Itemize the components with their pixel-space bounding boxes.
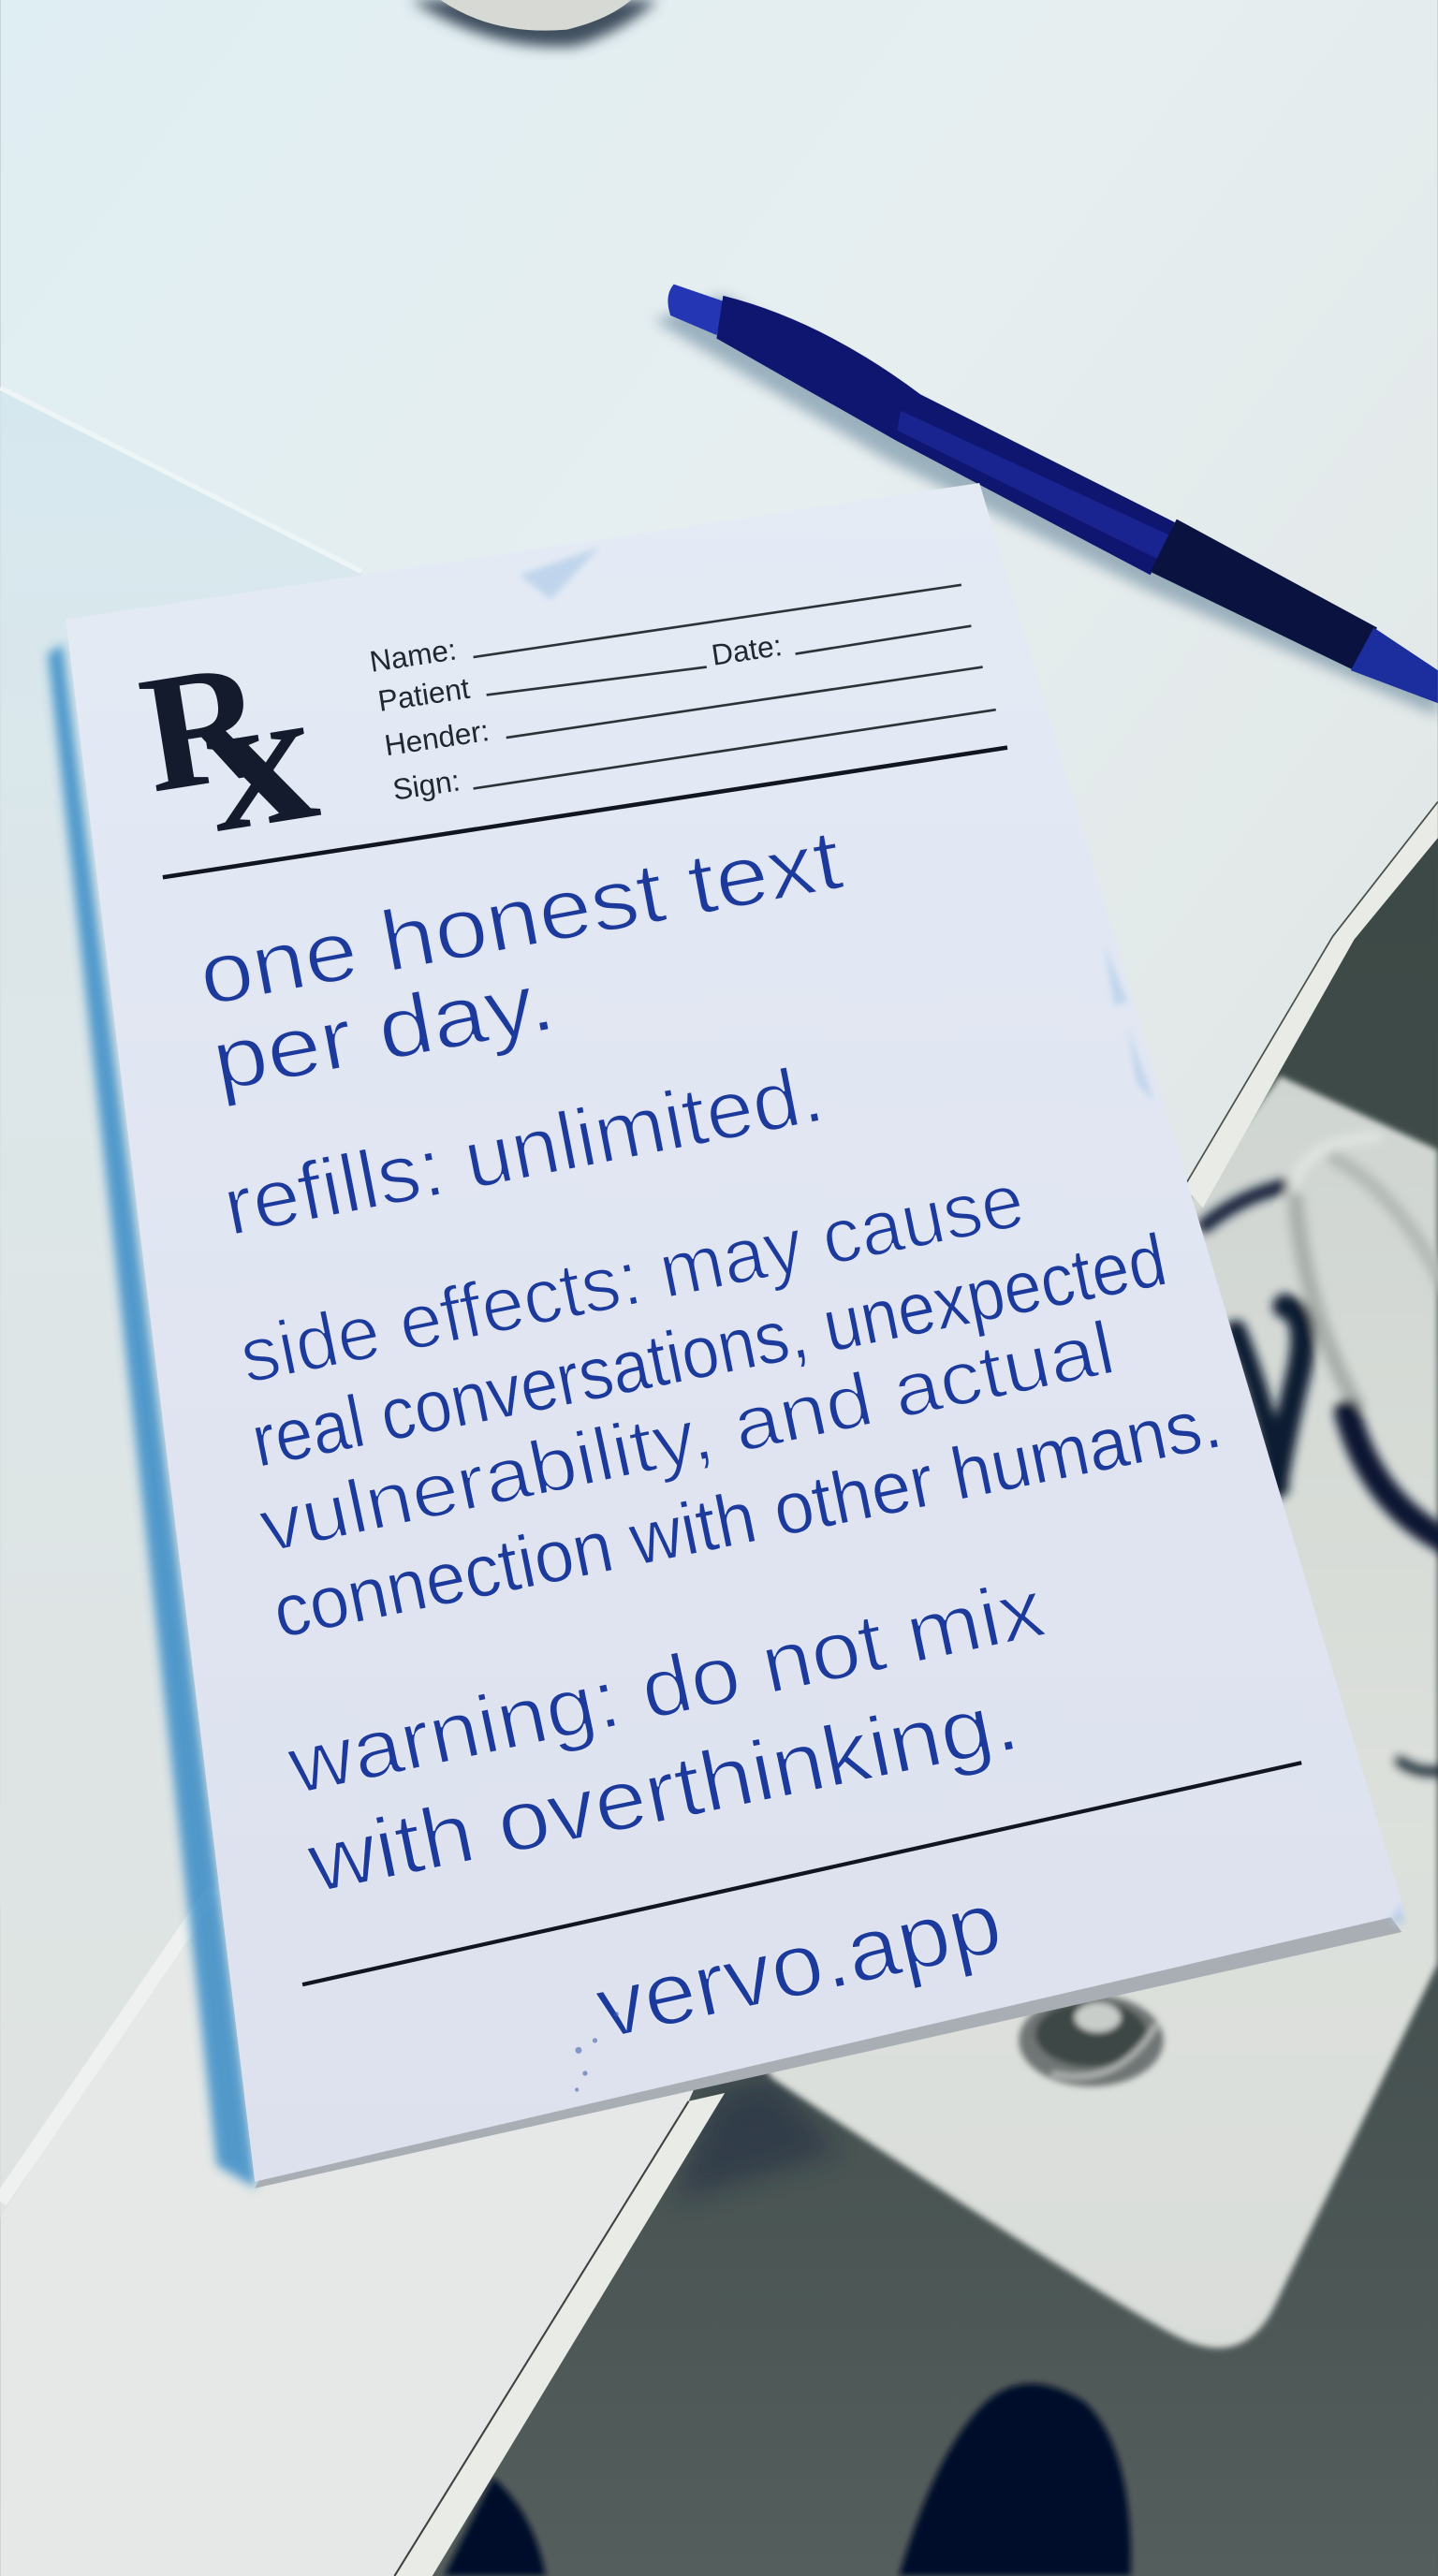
handwritten dosage: one honest text xyxy=(192,812,849,1024)
handwritten dosage: per day. xyxy=(205,953,562,1109)
clear plastic sheet xyxy=(0,388,526,2217)
handwritten side effects: side effects: may cause xyxy=(233,1157,1031,1399)
prescription note xyxy=(66,483,1405,2188)
Rx symbol: R xyxy=(129,624,280,827)
form fields: Hender: xyxy=(382,713,492,762)
form fields: Name: xyxy=(368,632,459,679)
handwritten side effects: real conversations, unexpected xyxy=(245,1218,1173,1483)
Rx symbol: x xyxy=(190,645,329,873)
stool seat (blurred, background) xyxy=(690,1076,1438,2348)
desk surface upper xyxy=(0,0,1438,1906)
handwritten side effects: connection with other humans. xyxy=(266,1381,1227,1653)
handwritten warning: warning: do not mix xyxy=(280,1562,1051,1811)
handwritten side effects: vulnerability, and actual xyxy=(252,1306,1122,1569)
pen shadow xyxy=(654,296,1438,716)
object at top edge xyxy=(411,0,657,47)
stethoscope xyxy=(1205,1137,1438,1772)
form fields: Patient xyxy=(375,671,472,718)
Rx symbol xyxy=(129,624,329,873)
footer divider xyxy=(302,1763,1301,1984)
paper shadow xyxy=(48,644,257,2188)
handwritten side effects xyxy=(233,1157,1227,1653)
handwritten dosage xyxy=(192,812,849,1109)
handwritten app address: vervo.app xyxy=(588,1872,1010,2058)
handwritten warning xyxy=(280,1562,1051,1911)
shoe left xyxy=(444,2478,546,2576)
form fields: Date: xyxy=(710,628,785,672)
form fields: Sign: xyxy=(390,763,462,807)
shadow under desk xyxy=(674,2078,838,2202)
handwritten refills: refills: unlimited. xyxy=(216,1046,830,1252)
desk surface lower xyxy=(0,1808,822,2576)
handwritten warning: with overthinking. xyxy=(300,1673,1026,1911)
form fields xyxy=(368,585,996,807)
ink smudge xyxy=(575,2012,619,2092)
desk edge lower xyxy=(394,2093,725,2576)
desk edge upper xyxy=(1183,801,1438,1208)
pen xyxy=(668,285,1438,703)
blue smudges xyxy=(520,547,1405,1925)
stool knob xyxy=(1019,1995,1164,2086)
header divider xyxy=(163,748,1007,877)
paper thickness xyxy=(255,1914,1401,2188)
paper sheet xyxy=(66,483,1405,2182)
shoe right xyxy=(899,2384,1131,2576)
